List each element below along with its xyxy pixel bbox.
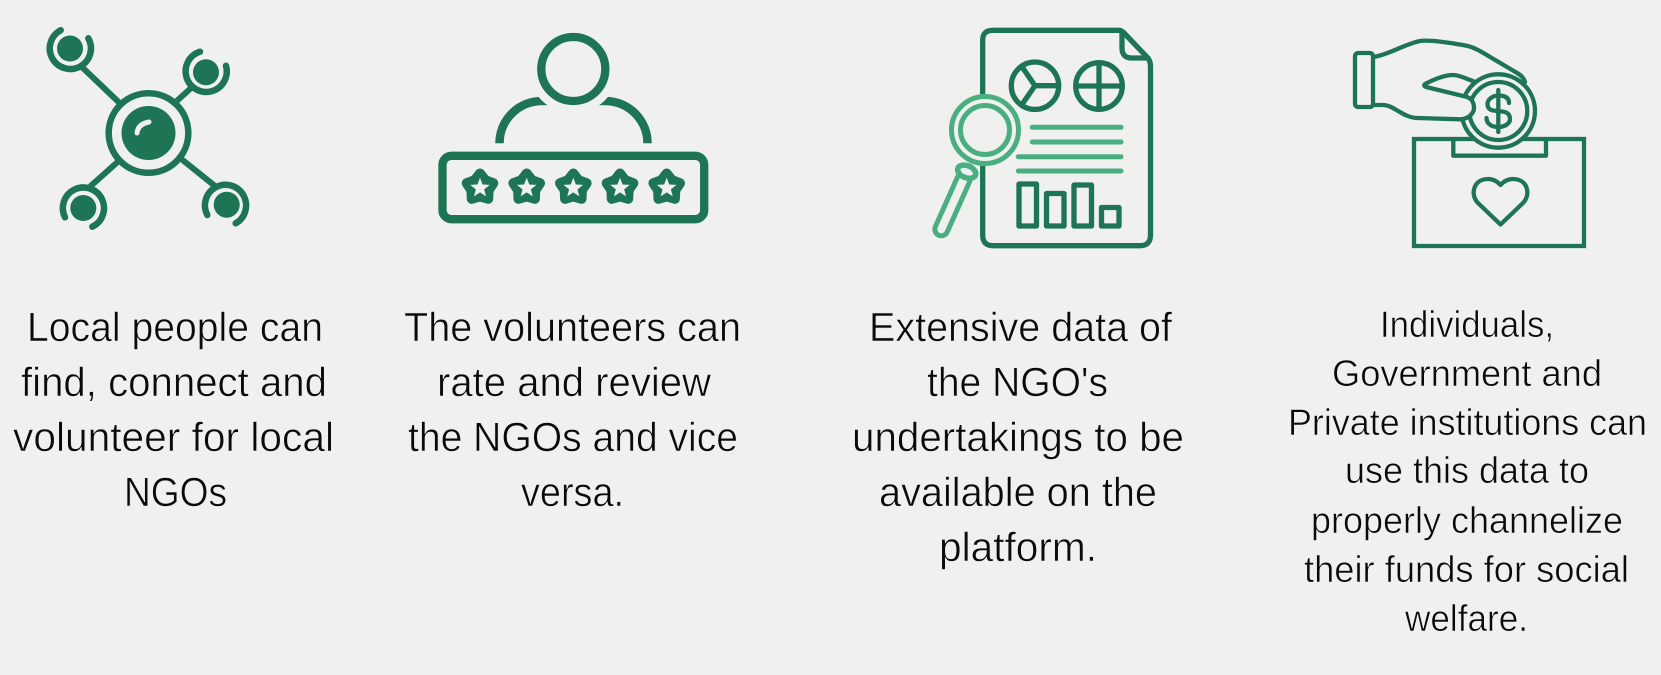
icon: network of connected people (50, 30, 246, 227)
text: local people can volunteer: volunteer for local (13, 414, 334, 460)
text: volunteers rate and review: the NGOs and vice (408, 414, 738, 460)
text: extensive data of undertakings: platform. (939, 524, 1097, 570)
text: local people can volunteer (13, 304, 334, 515)
text: volunteers rate and review: rate and review (437, 359, 711, 405)
icon: hand dropping coin into donation box (1355, 41, 1584, 246)
icon: person with five star rating (442, 24, 704, 219)
text: extensive data of undertakings: undertakings to be (852, 414, 1184, 460)
text: individuals, government and private institutions: properly channelize (1311, 500, 1623, 541)
panel: find and connect with local NGOs (13, 30, 334, 515)
panel: channelize funds (1288, 41, 1647, 639)
text: individuals, government and private institutions: use this data to (1345, 450, 1589, 491)
text: individuals, government and private institutions: their funds for social (1304, 549, 1629, 590)
text: individuals, government and private institutions: Private institutions can (1288, 402, 1647, 443)
text: local people can volunteer: find, connect and (21, 359, 327, 405)
panel: rate and review (404, 24, 741, 515)
panel: extensive data (852, 30, 1184, 570)
text: extensive data of undertakings (852, 304, 1184, 570)
text: local people can volunteer: Local people can (27, 304, 323, 350)
text: volunteers rate and review (404, 304, 741, 515)
text: extensive data of undertakings: available on the (879, 469, 1157, 515)
text: volunteers rate and review: versa. (521, 469, 624, 515)
icon: report document with magnifying glass (941, 30, 1150, 246)
text: individuals, government and private institutions: Individuals, (1380, 304, 1554, 345)
text: local people can volunteer: NGOs (124, 469, 227, 515)
text: individuals, government and private institutions (1288, 304, 1647, 639)
text: individuals, government and private institutions: Government and (1332, 353, 1602, 394)
text: volunteers rate and review: The volunteers can (404, 304, 741, 350)
text: extensive data of undertakings: Extensive data of (869, 304, 1173, 350)
text: extensive data of undertakings: the NGO's (927, 359, 1108, 405)
text: individuals, government and private institutions: welfare. (1404, 598, 1528, 639)
